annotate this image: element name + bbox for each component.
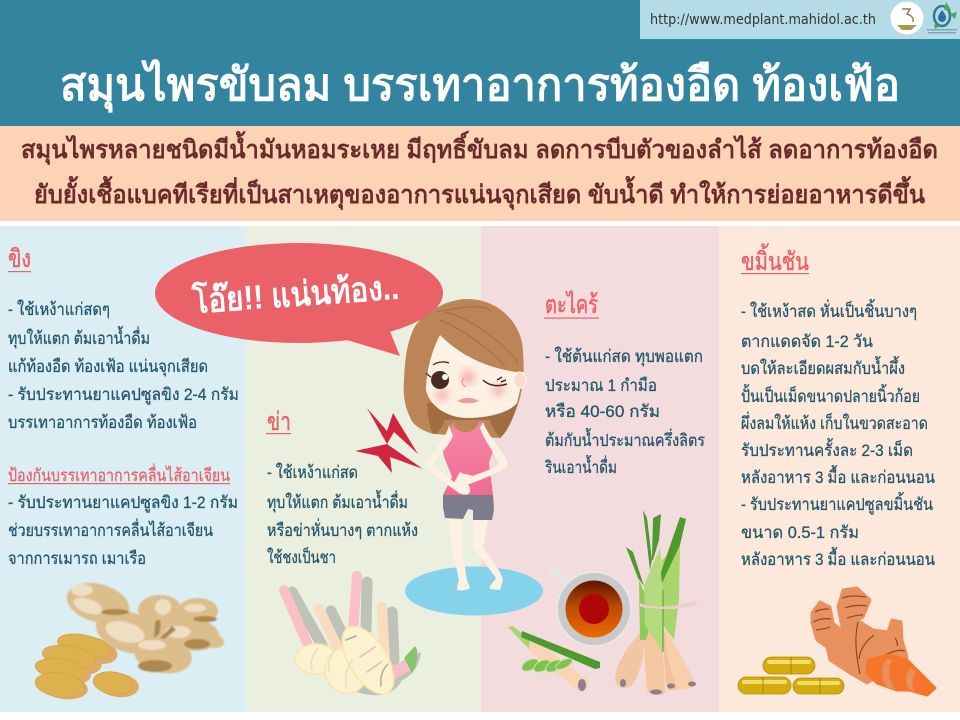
face <box>426 335 524 418</box>
hair back <box>404 299 524 438</box>
panel: galangal <box>246 226 481 712</box>
heading: turmeric: ขมิ้นชัน <box>741 243 809 276</box>
text block: turmeric usage: หลังอาหาร 3 มื้อ และก่อนนอน <box>741 547 935 569</box>
text block: ginger usage: - ใช้เหง้าแก่สดๆ <box>8 299 110 319</box>
text block: turmeric usage <box>741 299 935 569</box>
text block: turmeric usage: บดให้ละเอียดผสมกับน้ำผึ้ง <box>741 356 905 378</box>
speech bubble text: โอ๊ย!! แน่นท้อง.. <box>190 267 400 321</box>
text block: ginger usage: บรรเทาอาการท้องอืด ท้องเฟ้อ <box>8 413 197 432</box>
blush <box>436 370 504 401</box>
text block: ginger usage <box>8 299 239 432</box>
text block: nausea usage: จากการเมารถ เมาเรือ <box>8 549 146 568</box>
icon: capsules <box>738 657 844 694</box>
text block: ginger usage: ทุบให้แตก ต้มเอาน้ำดื่ม <box>8 326 150 349</box>
icon: sliced lemongrass <box>508 626 600 692</box>
text block: nausea usage: ช่วยบรรเทาอาการคลื่นไส้อาเจียน <box>8 518 213 540</box>
panel: turmeric <box>719 226 960 712</box>
text block: turmeric usage: ตากแดดจัด 1-2 วัน <box>741 332 873 351</box>
intro band: สมุนไพรหลายชนิดมีน้ำมันหอมระเหย มีฤทธิ์ขับลม ลดการบีบตัวของลำไส้ ลดอาการท้องอืด <box>21 130 938 166</box>
speech bubble <box>155 243 443 356</box>
text block: lemongrass usage: ต้มกับน้ำประมาณครึ่งลิตร <box>545 428 705 450</box>
icon: pain lightning bolts <box>355 408 423 473</box>
floor mat <box>405 566 543 616</box>
text block: turmeric usage: ผึ่งลมให้แห้ง เก็บในขวดสะอาด <box>741 411 928 433</box>
text block: turmeric usage: - ใช้เหง้าสด หั่นเป็นชิ้นบางๆ <box>741 299 917 321</box>
text block: galangal usage: หรือข่าหั่นบางๆ ตากแห้ง <box>267 518 418 540</box>
text block: galangal usage <box>267 462 418 567</box>
eyes, nose and mouth <box>426 362 507 403</box>
text block: turmeric usage: หลังอาหาร 3 มื้อ และก่อนนอน <box>741 465 935 487</box>
intro band: ยับยั้งเชื้อแบคทีเรียที่เป็นสาเหตุของอาการแน่นจุกเสียด ขับน้ำดี ทำให้การย่อยอาหารดีขึ้น <box>34 175 925 211</box>
text block: galangal usage: ใช้ชงเป็นชา <box>267 546 336 567</box>
panel: lemongrass <box>481 226 719 712</box>
text block: lemongrass usage: หรือ 40-60 กรัม <box>545 402 660 421</box>
shorts <box>443 495 494 520</box>
bangs <box>436 300 523 372</box>
text block: nausea usage: - รับประทานยาแคปซูลขิง 1-2 กรัม <box>8 493 238 513</box>
heading: ginger: ขิง <box>8 245 31 273</box>
intro band <box>0 126 960 221</box>
heading: galangal: ข่า <box>267 408 291 436</box>
icon: ginger root and slices <box>34 576 224 702</box>
text block: galangal usage: ทุบให้แตก ต้มเอาน้ำดื่ม <box>267 490 408 513</box>
header banner <box>0 0 960 126</box>
legs <box>448 519 503 590</box>
arms <box>424 425 470 495</box>
icon: turmeric root <box>812 588 935 695</box>
subheading: nausea prevention: ป้องกันบรรเทาอาการคลื่นไส้อาเจียน <box>8 463 230 485</box>
text block: turmeric usage: ปั้นเป็นเม็ดขนาดปลายนิ้วก้อย <box>741 384 920 406</box>
panel: ginger <box>0 226 246 712</box>
tank top <box>443 420 493 495</box>
text block: turmeric usage: ขนาด 0.5-1 กรัม <box>741 523 859 542</box>
heading: lemongrass: ตะไคร้ <box>545 290 598 319</box>
text block: ginger usage: แก้ท้องอืด ท้องเฟ้อ แน่นจุกเสียด <box>8 357 208 377</box>
text block: galangal usage: - ใช้เหง้าแก่สด <box>267 462 358 482</box>
website and logos box: http://www.medplant.mahidol.ac.th <box>650 12 876 28</box>
ear <box>514 372 526 388</box>
text block: ginger usage: - รับประทานยาแคปซูลขิง 2-4 กรัม <box>8 385 239 405</box>
icon: lemongrass bundle <box>615 510 697 695</box>
title: สมุนไพรขับลม บรรเทาอาการท้องอืด ท้องเฟ้อ <box>60 58 900 113</box>
text block: turmeric usage: รับประทานครั้งละ 2-3 เม็ด <box>741 438 913 460</box>
text block: lemongrass usage: - ใช้ต้นแก่สด ทุบพอแตก <box>545 346 703 367</box>
text block: lemongrass usage: ประมาณ 1 กำมือ <box>545 376 657 395</box>
illustration: woman with stomach ache <box>404 299 526 590</box>
text block: turmeric usage: - รับประทานยาแคปซูลขมิ้นชัน <box>741 492 933 515</box>
icon: galangal <box>284 576 421 702</box>
website and logos box <box>640 0 960 39</box>
icon: cup of tea <box>548 566 631 646</box>
text block: lemongrass usage <box>544 346 705 477</box>
text block: nausea usage <box>8 493 238 568</box>
text block: lemongrass usage: รินเอาน้ำดื่ม <box>544 455 617 477</box>
